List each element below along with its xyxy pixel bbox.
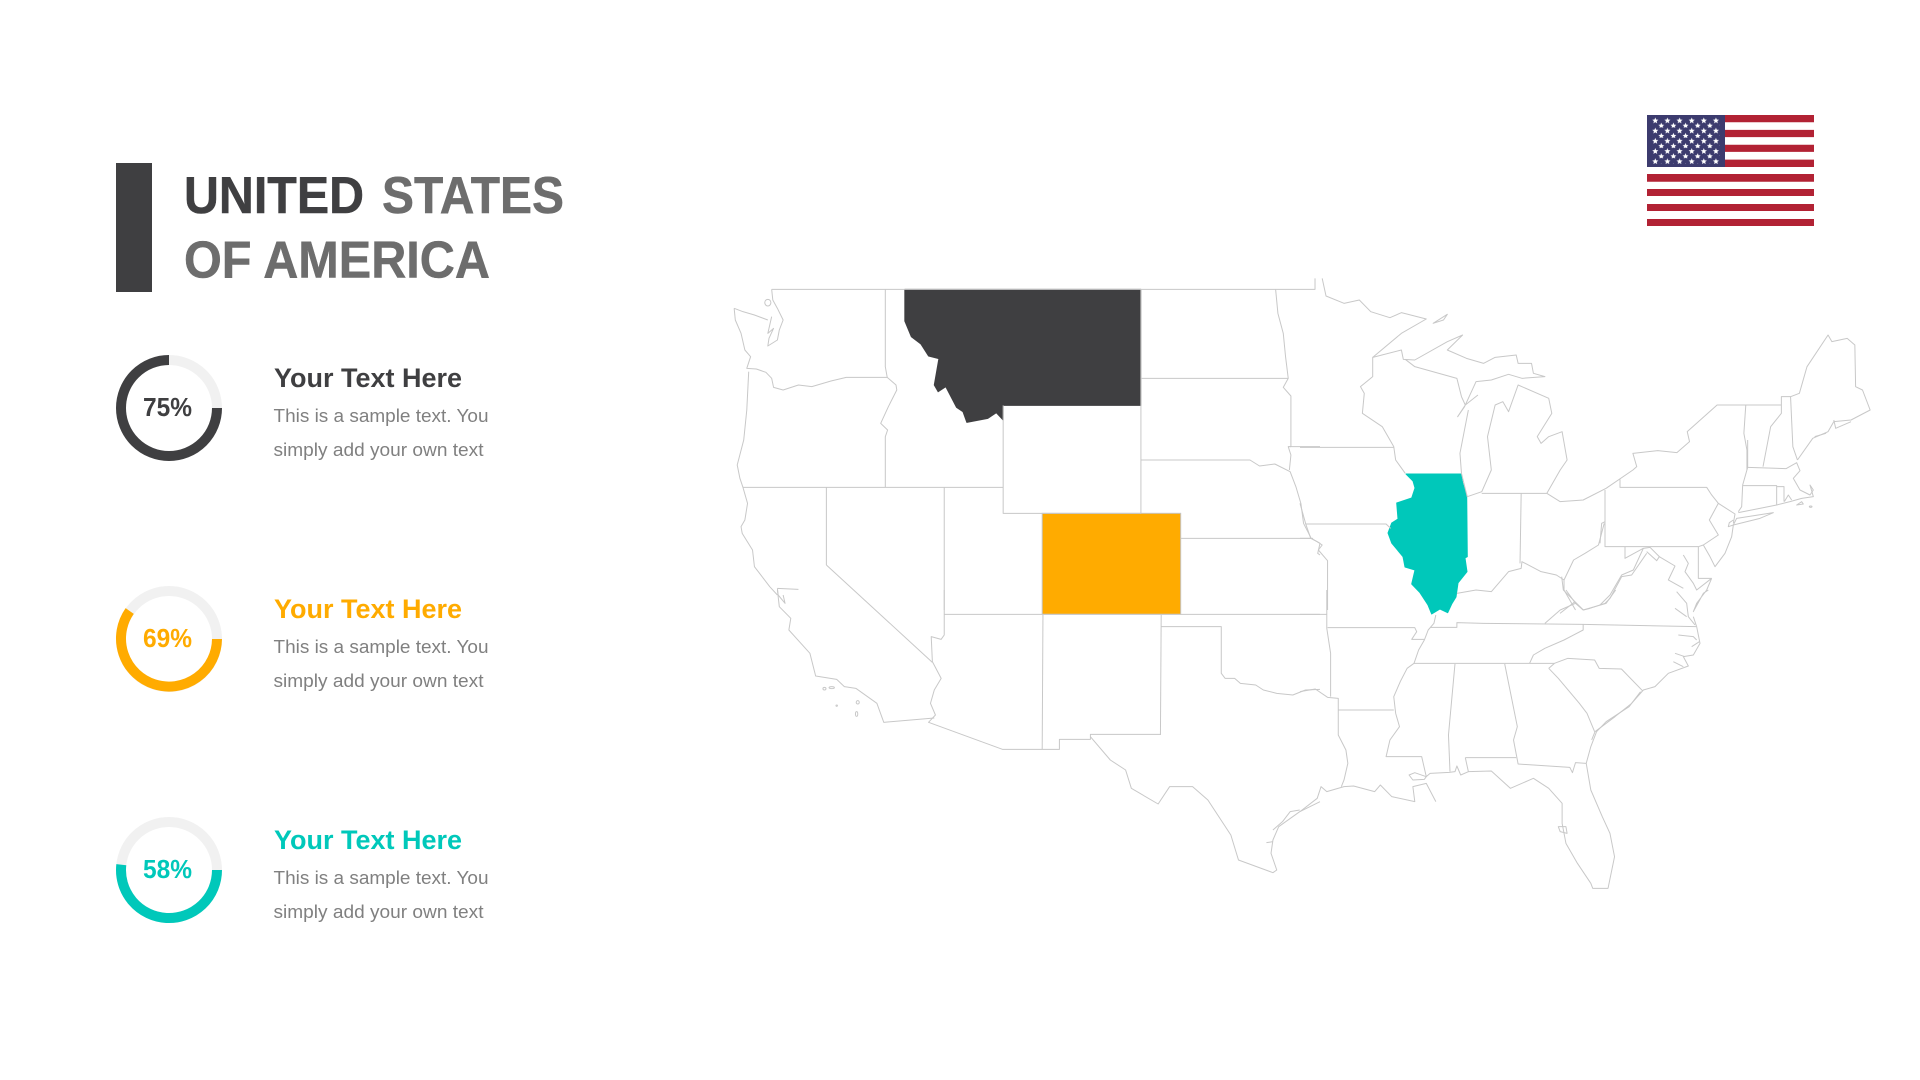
stat 2: 69% donut and text: 69% [143,623,192,653]
state: Montana [905,289,1141,422]
state: Illinois [1388,474,1467,614]
northwest state borders [734,278,1320,610]
stat 1: 75% donut and text: This is a sample text. You [274,405,488,426]
stat 3: 58% donut and text [121,822,488,922]
title accent bar [116,163,152,292]
title: OF AMERICA [184,232,490,290]
title: STATES [382,167,564,225]
stat 1: 75% donut and text [121,360,488,460]
stat 1: 75% donut and text: Your Text Here [274,363,462,393]
stat 2: 69% donut and text: simply add your own text [274,670,484,691]
Virginia and Carolina coast [1560,553,1700,740]
stat 3: 58% donut and text: Your Text Here [274,825,462,855]
southwest state borders [777,565,1320,873]
stat 2: 69% donut and text: Your Text Here [274,594,462,624]
stat 1: 75% donut and text: 75% [143,392,192,422]
stat 1: 75% donut and text: simply add your own text [274,439,484,460]
icon: US flag [1647,115,1814,226]
state: Colorado [1042,513,1181,614]
stat 3: 58% donut and text: simply add your own text [274,901,484,922]
southeast state borders [1300,590,1696,888]
mid-Atlantic and New England state borders [1600,440,1813,625]
northeast state borders [1300,278,1870,610]
stat 2: 69% donut and text: This is a sample text. You [274,636,488,657]
stat 3: 58% donut and text: 58% [143,854,192,884]
title [184,167,564,290]
US map [734,278,1870,888]
stat 2: 69% donut and text [121,591,488,691]
title: UNITED [184,167,364,225]
stat 3: 58% donut and text: This is a sample text. You [274,867,488,888]
